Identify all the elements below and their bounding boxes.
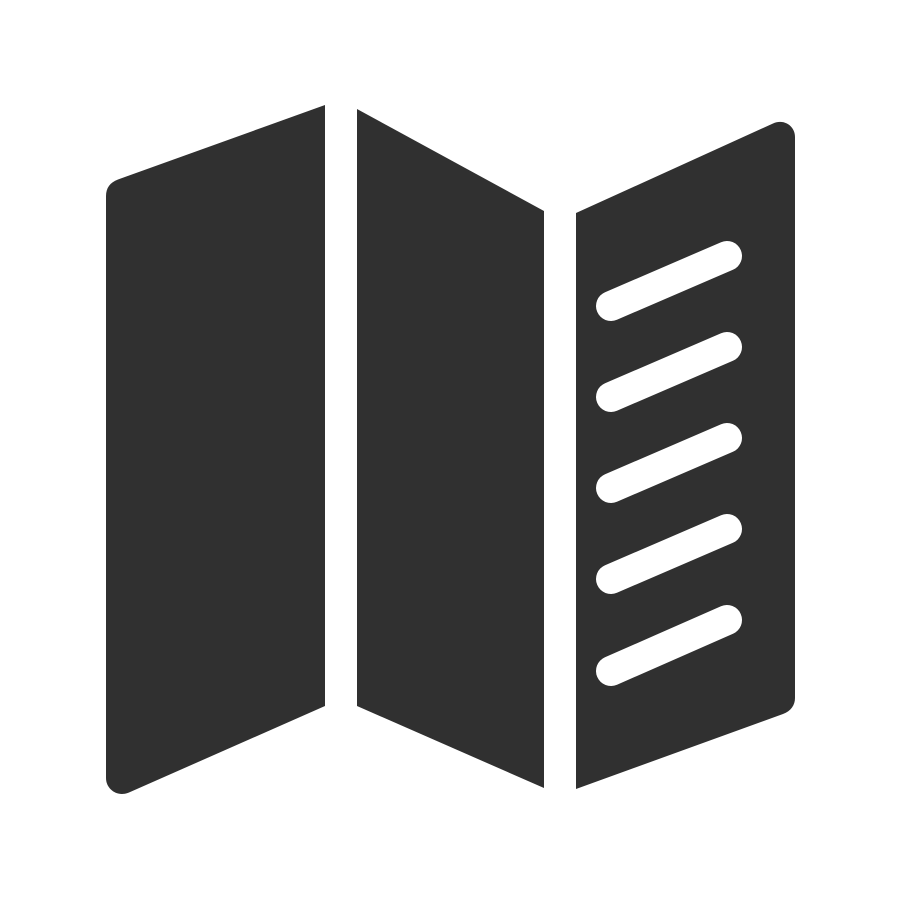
line 5 <box>611 620 727 671</box>
line 1 <box>611 256 727 306</box>
line 4 <box>611 529 727 579</box>
panel: left fold <box>106 105 325 794</box>
panel: middle fold <box>357 109 544 788</box>
line 3 <box>611 438 727 488</box>
line 2 <box>611 347 727 397</box>
text lines on right fold <box>611 256 727 671</box>
panel: right fold <box>576 122 795 789</box>
